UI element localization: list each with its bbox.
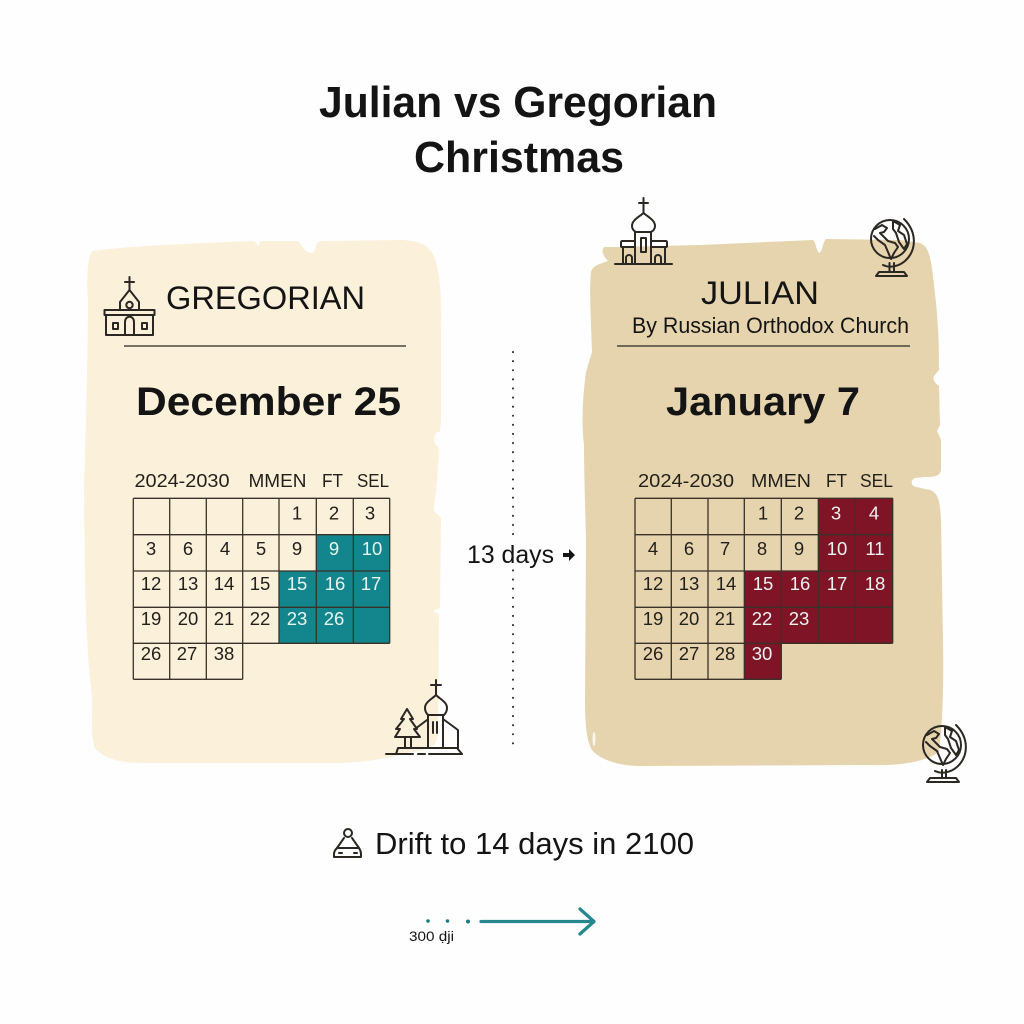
calendar numbers: 4 [648, 538, 658, 559]
calendar numbers: 21 [715, 608, 735, 629]
calendar numbers: 30 [752, 643, 772, 664]
calendar: julian [635, 470, 893, 679]
highlight: left edge nick [592, 732, 596, 746]
calendar numbers: 14 [716, 573, 736, 594]
calendar header [134, 470, 389, 491]
arrow: teal [481, 909, 594, 934]
calendar numbers: 38 [214, 643, 234, 664]
calendar numbers: 20 [178, 608, 198, 629]
date: january 7: January 7 [666, 380, 860, 424]
calendar numbers: 2 [329, 502, 339, 524]
calendar numbers: 22 [752, 608, 772, 629]
icon: church [104, 277, 154, 335]
calendar numbers: 9 [292, 538, 302, 559]
calendar header: MMEN [248, 470, 306, 491]
parchment background: gregorian [84, 240, 441, 763]
calendar numbers [141, 502, 382, 664]
calendar numbers: 9 [794, 538, 804, 559]
calendar numbers: 17 [827, 573, 847, 594]
panel: julian [583, 198, 966, 782]
calendar numbers: 1 [758, 502, 768, 524]
calendar numbers: 12 [643, 573, 663, 594]
calendar numbers: 21 [214, 608, 234, 629]
calendar numbers: 9 [329, 538, 339, 559]
date: december 25: December 25 [136, 380, 401, 424]
dots [426, 919, 470, 924]
calendar numbers: 20 [679, 608, 699, 629]
calendar numbers: 19 [141, 608, 161, 629]
calendar header: 2024-2030 [638, 470, 734, 491]
icon: globe bottom [923, 725, 966, 782]
calendar numbers: 10 [362, 538, 382, 559]
calendar numbers: 3 [831, 502, 841, 524]
callout: drift note: Drift to 14 days in 2100 [375, 826, 694, 861]
calendar header: MMEN [751, 470, 811, 491]
calendar numbers: 13 [679, 573, 699, 594]
calendar numbers: 6 [183, 538, 193, 559]
calendar numbers: 16 [790, 573, 810, 594]
panel: gregorian [84, 240, 462, 763]
calendar numbers: 22 [250, 608, 270, 629]
calendar numbers: 5 [256, 538, 266, 559]
title: Julian vs Gregorian [319, 78, 717, 127]
title: Christmas [414, 133, 624, 182]
calendar header: FT [322, 470, 343, 491]
calendar numbers: 4 [869, 502, 879, 524]
highlighted days: maroon [744, 498, 893, 679]
calendar numbers: 26 [141, 643, 161, 664]
calendar numbers: 16 [325, 573, 345, 594]
calendar numbers: 7 [720, 538, 730, 559]
calendar numbers: 27 [177, 643, 197, 664]
calendar numbers: 23 [789, 608, 809, 629]
calendar numbers: 3 [365, 502, 375, 524]
timeline label: 300 ḍji [409, 928, 454, 944]
calendar numbers: 12 [141, 573, 161, 594]
calendar numbers: 4 [220, 538, 230, 559]
heading: gregorian: GREGORIAN [166, 280, 365, 316]
icon: stamp [334, 829, 361, 857]
calendar numbers [643, 502, 885, 664]
calendar numbers: 3 [146, 538, 156, 559]
calendar header: SEL [860, 470, 893, 491]
calendar numbers: 26 [324, 608, 344, 629]
calendar numbers: 15 [753, 573, 773, 594]
calendar header: SEL [357, 470, 389, 491]
calendar numbers: 13 [178, 573, 198, 594]
calendar: gregorian [133, 470, 390, 679]
calendar numbers: 19 [643, 608, 663, 629]
calendar numbers: 28 [715, 643, 735, 664]
calendar numbers: 2 [794, 502, 804, 524]
calendar numbers: 15 [250, 573, 270, 594]
divider: dotted line [512, 352, 514, 746]
calendar header [638, 470, 893, 491]
calendar header: 2024-2030 [134, 470, 230, 491]
subheading: By Russian Orthodox Church [632, 313, 909, 338]
calendar header: FT [826, 470, 847, 491]
calendar numbers: 18 [865, 573, 885, 594]
calendar numbers: 23 [287, 608, 307, 629]
calendar numbers: 14 [214, 573, 234, 594]
heading: julian: JULIAN [701, 275, 819, 311]
parchment background: julian [583, 239, 943, 766]
calendar numbers: 11 [865, 538, 885, 559]
calendar numbers: 10 [827, 538, 847, 559]
calendar numbers: 8 [757, 538, 767, 559]
calendar numbers: 17 [361, 573, 381, 594]
callout: 13 days [462, 538, 580, 569]
calendar numbers: 6 [684, 538, 694, 559]
callout: 13 days: 13 days [467, 541, 554, 569]
title [319, 78, 717, 182]
timeline arrow [409, 909, 594, 944]
icon: globe top [871, 219, 914, 276]
icon: chapel with tree [386, 680, 462, 754]
highlighted days: teal [279, 535, 390, 643]
icon: orthodox church [615, 198, 672, 264]
calendar numbers: 26 [643, 643, 663, 664]
arrow: small [563, 549, 575, 561]
calendar numbers: 1 [292, 502, 302, 524]
calendar numbers: 27 [679, 643, 699, 664]
calendar numbers: 15 [287, 573, 307, 594]
